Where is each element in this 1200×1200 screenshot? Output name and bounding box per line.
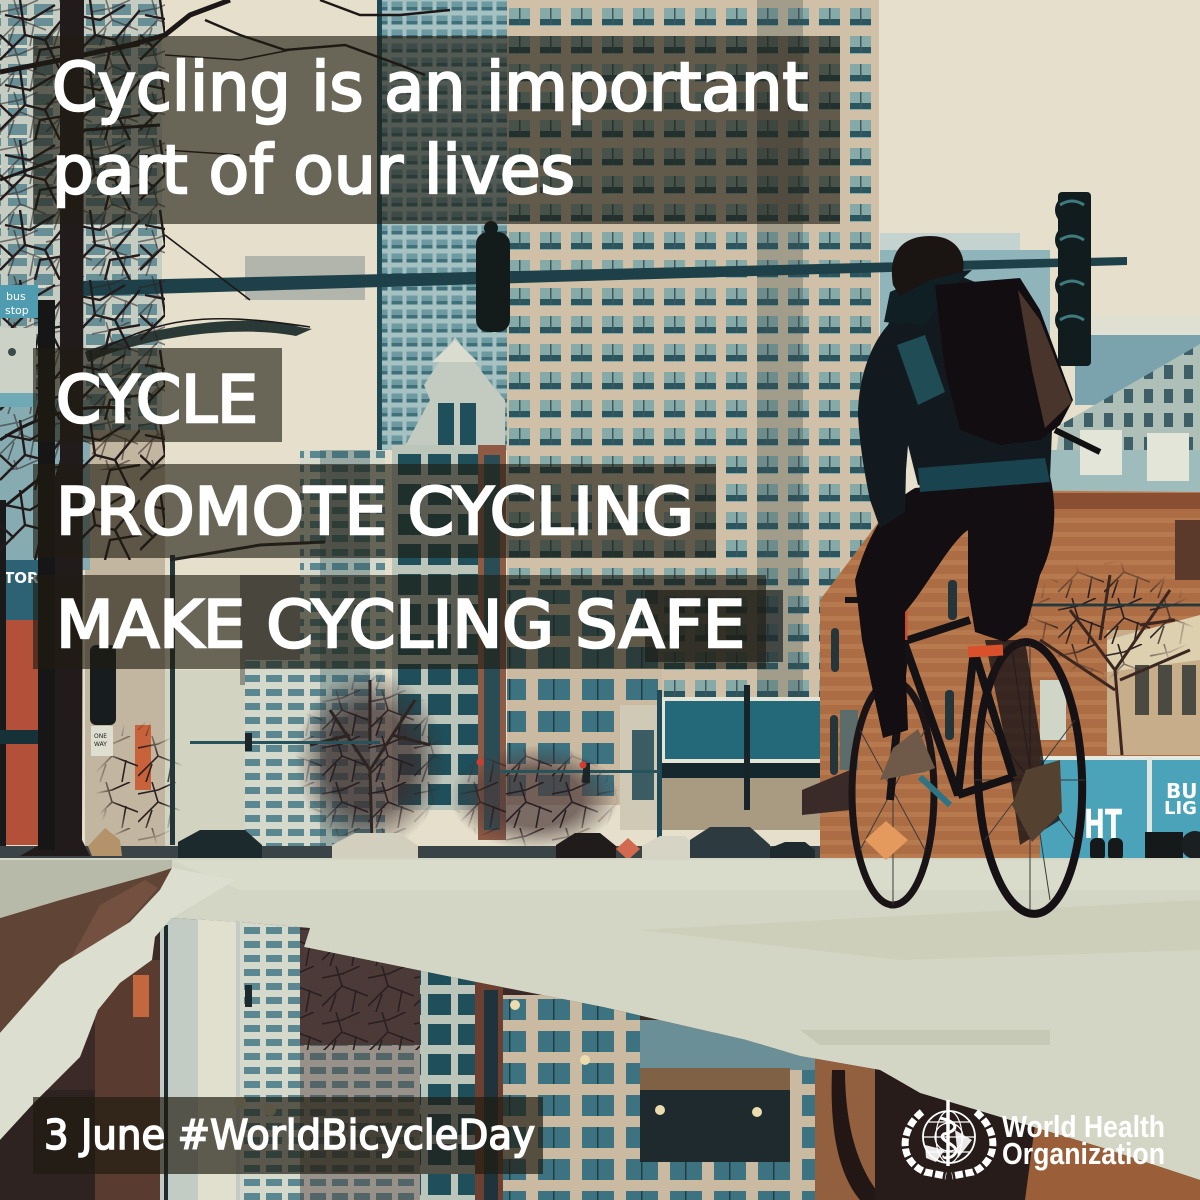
overhead mast arm [80, 256, 1127, 362]
organisation name: World Health [1002, 1109, 1165, 1144]
sky [0, 0, 1200, 900]
dense bare branches top left [0, 0, 450, 560]
blue truck: BU [1166, 779, 1197, 803]
bicycle frame [845, 600, 1013, 805]
kerb [0, 868, 172, 1033]
orange banner [135, 725, 151, 790]
hood [884, 270, 972, 325]
puddle reflection [0, 900, 1200, 1200]
jacket [858, 272, 1052, 528]
saddle [970, 527, 1020, 536]
one way sign: WAY [94, 741, 107, 748]
distant mast arms and signals [170, 542, 660, 845]
blue truck: LIG [1164, 798, 1197, 819]
icon: WHO emblem [905, 1100, 993, 1176]
message: cycle [33, 348, 282, 442]
far leg seen through wheel [985, 640, 1060, 845]
title panel [33, 36, 840, 224]
street cars [0, 827, 820, 860]
near shoe [880, 729, 935, 780]
billboard [657, 685, 820, 840]
right background buildings [880, 233, 1200, 500]
title line 2: part of our lives [52, 131, 575, 209]
traffic light right [1055, 192, 1091, 366]
bus stop sign [0, 285, 38, 407]
one way sign [91, 726, 113, 756]
left red building [0, 500, 45, 850]
far shoe [1012, 760, 1062, 842]
orange road sign behind wheel [865, 821, 908, 860]
traffic light centre [476, 221, 510, 332]
glass tower [377, 0, 510, 450]
backpack [935, 278, 1100, 452]
WHO logo [905, 1100, 1165, 1176]
main residential tower [507, 0, 879, 830]
one way sign: ONE [94, 733, 107, 740]
front bicycle wheel [852, 681, 934, 905]
snow beside kerb [0, 868, 235, 1140]
road surface [0, 858, 1200, 1200]
centre tree canopy [95, 670, 620, 850]
left pale building behind branches [0, 0, 165, 850]
message: promote cycling: PROMOTE CYCLING [56, 475, 694, 550]
blue truck: HT [1084, 802, 1122, 848]
bare tree on brick building [1025, 560, 1200, 755]
left traffic pole [20, 0, 122, 856]
message: make cycling safe: MAKE CYCLING SAFE [56, 588, 745, 663]
bus stop sign: stop [5, 304, 29, 317]
blue truck [1040, 756, 1200, 861]
distant towers down the street [165, 450, 385, 850]
date and hashtag: 3 June #WorldBicycleDay [44, 1111, 535, 1159]
cyclist on bicycle [845, 236, 1100, 916]
bus stop sign: bus [6, 290, 26, 303]
head and hair [892, 236, 964, 296]
WHO logo: Organization [1002, 1136, 1165, 1171]
white pointed building [392, 337, 506, 840]
trouser legs [855, 476, 1054, 738]
message: cycle: CYCLE [56, 363, 258, 438]
rear bicycle wheel [973, 640, 1087, 916]
title line 1: Cycling is an important [52, 48, 808, 126]
left pale building behind branches: TORE [4, 569, 49, 587]
date and hashtag [33, 1097, 543, 1174]
brick building [802, 490, 1200, 860]
